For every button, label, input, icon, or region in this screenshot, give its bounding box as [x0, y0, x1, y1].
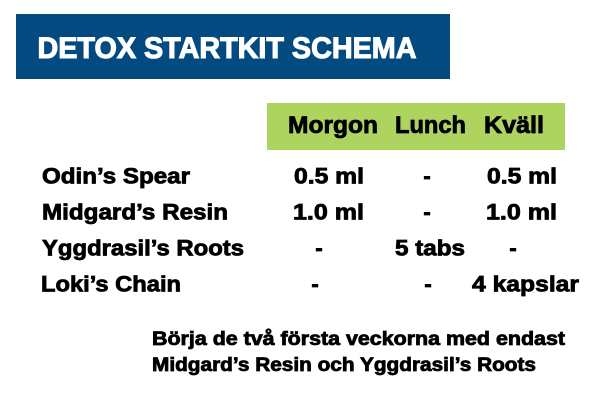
row: Yggdrasil's Roots: -: [315, 236, 323, 260]
row: Odin's Spear: [42, 164, 557, 188]
table header: time of day: Morgon: [288, 112, 378, 139]
row: Yggdrasil's Roots: Yggdrasil’s Roots: [42, 236, 244, 260]
row: Loki's Chain: [41, 272, 579, 296]
table header: time of day: Lunch: [395, 112, 466, 139]
row: Loki's Chain: Loki’s Chain: [41, 272, 181, 296]
title banner: [16, 14, 450, 79]
row: Yggdrasil's Roots: 5 tabs: [395, 236, 465, 260]
row: Loki's Chain: 4 kapslar: [472, 272, 579, 296]
row: Loki's Chain: -: [311, 272, 319, 296]
row: Odin's Spear: Odin’s Spear: [42, 164, 190, 188]
row: Loki's Chain: -: [424, 272, 432, 296]
row: Midgard's Resin: 1.0 ml: [486, 200, 557, 224]
footnote: Börja de två första veckorna med endast: [152, 329, 566, 350]
footnote: Midgard’s Resin och Yggdrasil’s Roots: [152, 355, 536, 376]
row: Odin's Spear: 0.5 ml: [487, 164, 557, 188]
footnote: [152, 329, 566, 376]
title banner: DETOX STARTKIT SCHEMA: [38, 32, 416, 65]
row: Midgard's Resin: 1.0 ml: [293, 200, 364, 224]
row: Yggdrasil's Roots: -: [509, 236, 517, 260]
row: Midgard's Resin: [42, 200, 557, 224]
row: Midgard's Resin: -: [423, 200, 431, 224]
row: Yggdrasil's Roots: [42, 236, 517, 260]
row: Odin's Spear: 0.5 ml: [294, 164, 364, 188]
row: Midgard's Resin: Midgard’s Resin: [42, 200, 228, 224]
table header: time of day: Kväll: [484, 112, 544, 139]
table header: time of day: [267, 103, 565, 150]
row: Odin's Spear: -: [423, 164, 431, 188]
